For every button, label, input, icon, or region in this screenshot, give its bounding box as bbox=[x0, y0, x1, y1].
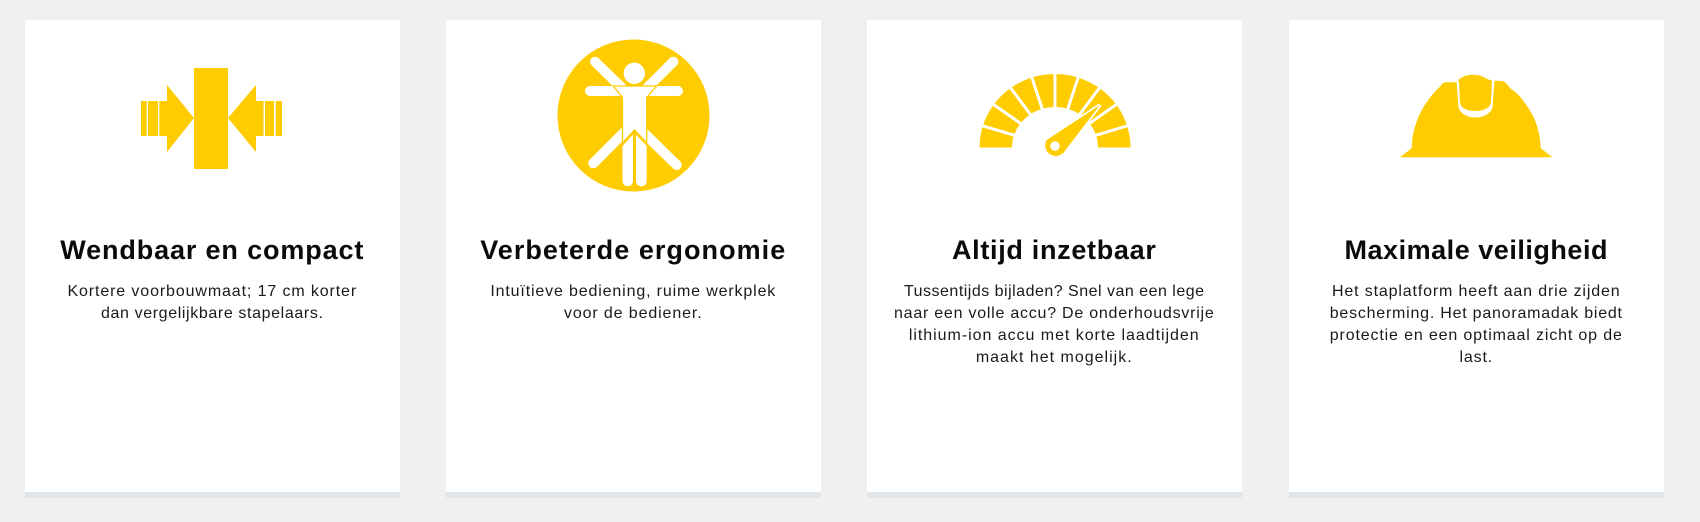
panel: maximale veiligheid bbox=[1289, 20, 1664, 498]
text block: dan vergelijkbare stapelaars. bbox=[101, 305, 324, 322]
heading: Wendbaar en compact bbox=[60, 235, 364, 265]
text block: bescherming. Het panoramadak biedt bbox=[1330, 305, 1623, 322]
icon: compression arrows bbox=[141, 68, 282, 169]
text block: voor de bediener. bbox=[564, 305, 703, 322]
text block: Tussentijds bijladen? Snel van een lege bbox=[904, 283, 1204, 300]
icon: human figure in circle bbox=[558, 40, 710, 192]
panel: verbeterde ergonomie bbox=[446, 20, 820, 498]
heading: Maximale veiligheid bbox=[1344, 235, 1608, 265]
panel: altijd inzetbaar bbox=[867, 20, 1242, 498]
text block: Kortere voorbouwmaat; 17 cm korter bbox=[67, 283, 357, 300]
heading: Verbeterde ergonomie bbox=[480, 235, 786, 265]
text block: Het staplatform heeft aan drie zijden bbox=[1332, 283, 1620, 300]
text block: protectie en een optimaal zicht op de bbox=[1330, 327, 1623, 344]
text block bbox=[894, 283, 1214, 366]
text block bbox=[490, 283, 776, 322]
text block bbox=[67, 283, 357, 322]
text block bbox=[1330, 283, 1623, 366]
icon: speedometer gauge bbox=[980, 74, 1130, 156]
heading: Altijd inzetbaar bbox=[952, 235, 1157, 265]
text block: lithium-ion accu met korte laadtijden bbox=[909, 327, 1200, 344]
panel: wendbaar en compact bbox=[25, 20, 400, 498]
text block: naar een volle accu? De onderhoudsvrije bbox=[894, 305, 1214, 322]
icon: hard hat bbox=[1400, 74, 1552, 158]
text block: maakt het mogelijk. bbox=[976, 349, 1133, 366]
text block: Intuïtieve bediening, ruime werkplek bbox=[490, 283, 776, 300]
text block: last. bbox=[1459, 349, 1493, 366]
